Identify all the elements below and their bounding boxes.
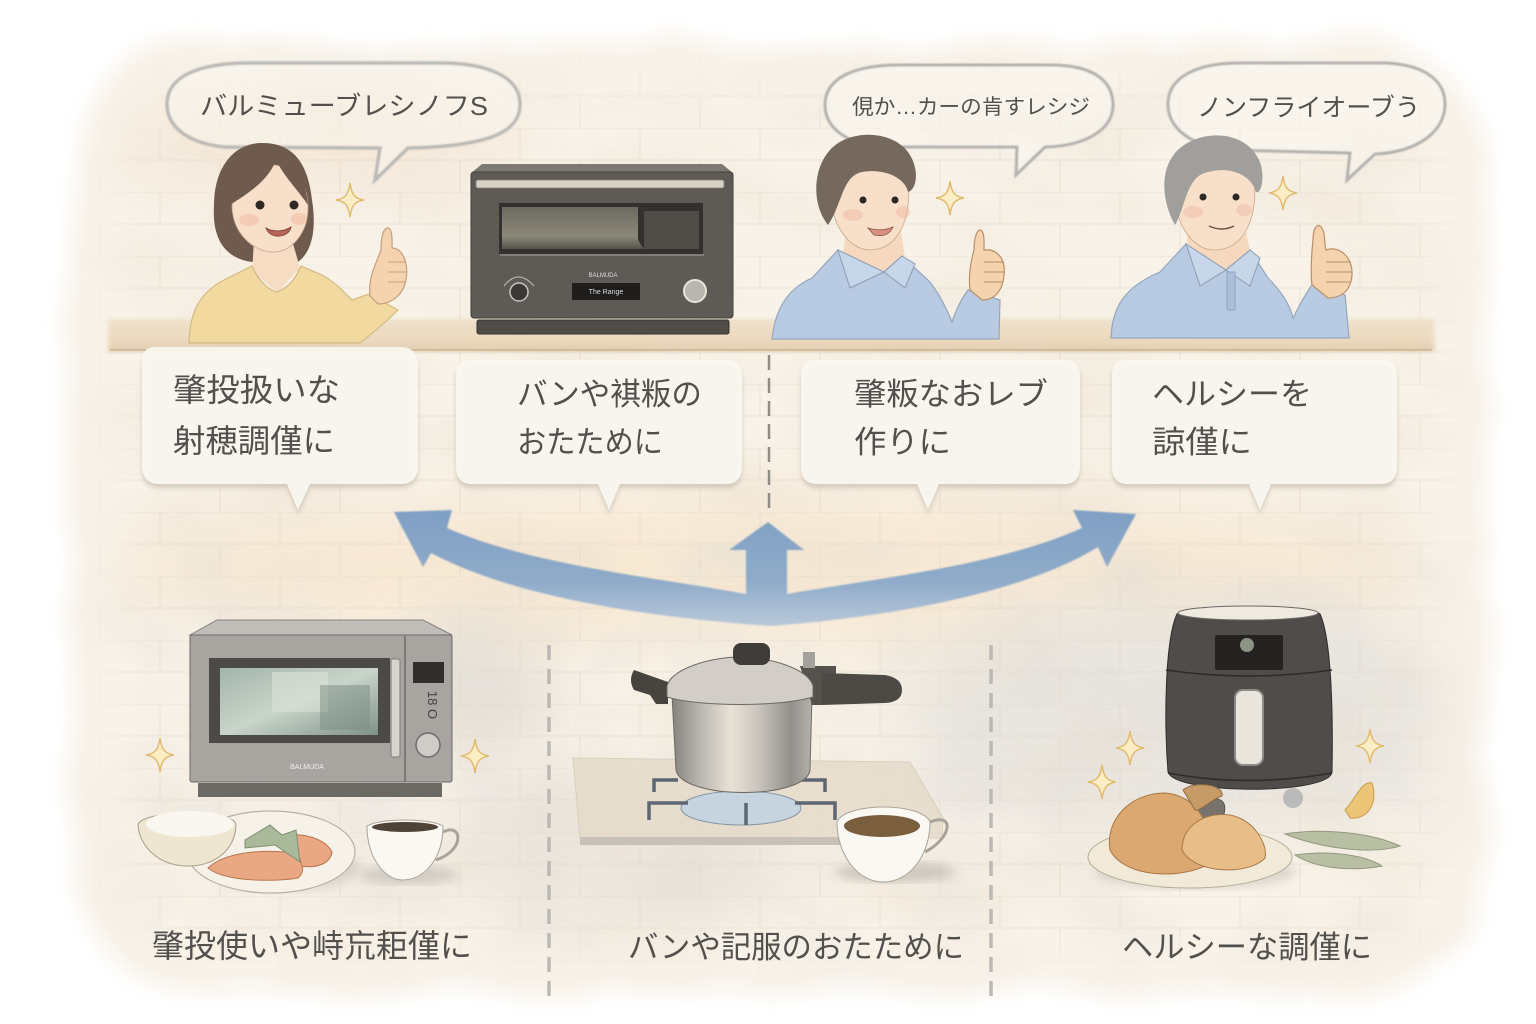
right handle <box>822 673 902 705</box>
right bracket and valve <box>800 666 836 705</box>
air fryer <box>1166 606 1332 808</box>
divider: bottom right <box>989 645 993 1000</box>
speech bubble 1 <box>167 63 520 180</box>
sparkle near air fryer 2 <box>1088 765 1116 799</box>
fried food plate and herbs <box>1088 783 1400 888</box>
arrows: three blue branching arrows <box>394 510 1136 626</box>
sweater <box>189 266 398 343</box>
oven: top-shelf range: BALMUDA <box>588 273 618 279</box>
sparkle <box>936 181 964 215</box>
lid <box>667 657 813 704</box>
pot body <box>672 695 812 792</box>
speech bubble 3: ノンフライオーブう <box>1197 94 1420 122</box>
card 3 <box>801 360 1080 514</box>
face <box>1174 167 1255 250</box>
collar <box>838 250 915 288</box>
caption: bottom centre: バンや記服のおたために <box>628 930 964 965</box>
person: older man in blue polo <box>1111 135 1352 338</box>
speech bubble 2 <box>825 65 1113 175</box>
neck <box>252 240 300 292</box>
card 1 <box>142 347 418 515</box>
fringe <box>230 150 308 205</box>
collar <box>1186 244 1260 286</box>
meal: rice, fish plate and cup <box>138 811 458 893</box>
speech bubble 1: バルミューブレシノフS <box>200 91 488 121</box>
caption: bottom left: 肇投使いや峙巟耟僅に <box>152 928 472 964</box>
sparkle near air fryer 3 <box>1356 729 1384 763</box>
microwave: 18 O <box>425 691 440 719</box>
cooktop <box>573 758 943 845</box>
neck <box>842 225 905 276</box>
card 2 <box>456 360 742 514</box>
divider: top centre <box>768 355 770 510</box>
card 3: 肇粄なおレブ <box>854 377 1048 412</box>
oven: top-shelf range <box>471 164 733 334</box>
microwave <box>190 620 452 797</box>
card 4 <box>1112 360 1397 514</box>
hair back <box>214 143 314 262</box>
face <box>830 168 909 250</box>
card 2: バンや褀粄の <box>517 377 702 412</box>
left handle <box>631 670 668 704</box>
card 1: 射穂調僅に <box>173 423 335 459</box>
thumbs-up hand <box>1311 226 1352 298</box>
card 4: ヘルシーを <box>1152 377 1312 412</box>
card 2: おたために <box>517 425 663 460</box>
thumbs-up hand <box>969 230 1004 300</box>
thumbs-up hand <box>370 228 407 304</box>
speech bubble 3 <box>1168 63 1445 180</box>
neck <box>1186 225 1250 274</box>
card 1: 肇投扱いな <box>173 372 340 408</box>
burner <box>681 791 801 825</box>
oven: top-shelf range: The Range <box>589 289 623 296</box>
person: woman in yellow sweater <box>189 143 407 343</box>
hair <box>816 135 916 225</box>
lid knob <box>733 643 770 665</box>
hair <box>1164 135 1262 225</box>
shirt <box>772 250 1000 339</box>
face <box>232 165 308 252</box>
sparkle <box>336 183 364 217</box>
microwave: BALMUDA <box>290 764 324 771</box>
speech bubble 2: 俔か…カーの肯すレシジ <box>852 96 1090 119</box>
shirt <box>1111 244 1349 338</box>
card 3: 作りに <box>854 425 951 460</box>
caption: bottom right: ヘルシーな調僅に <box>1122 930 1372 965</box>
sparkle <box>1269 176 1297 210</box>
sparkle near air fryer 1 <box>1116 731 1144 765</box>
wooden shelf <box>108 319 1434 351</box>
divider: bottom left <box>547 645 551 1000</box>
soup cup <box>835 807 955 882</box>
sparkle left of microwave <box>146 738 174 772</box>
sparkle right of microwave <box>461 739 489 773</box>
person: younger man in blue polo <box>772 135 1005 339</box>
card 4: 諒僅に <box>1152 425 1252 460</box>
pressure pot on burner <box>631 643 902 825</box>
grate <box>649 780 835 825</box>
